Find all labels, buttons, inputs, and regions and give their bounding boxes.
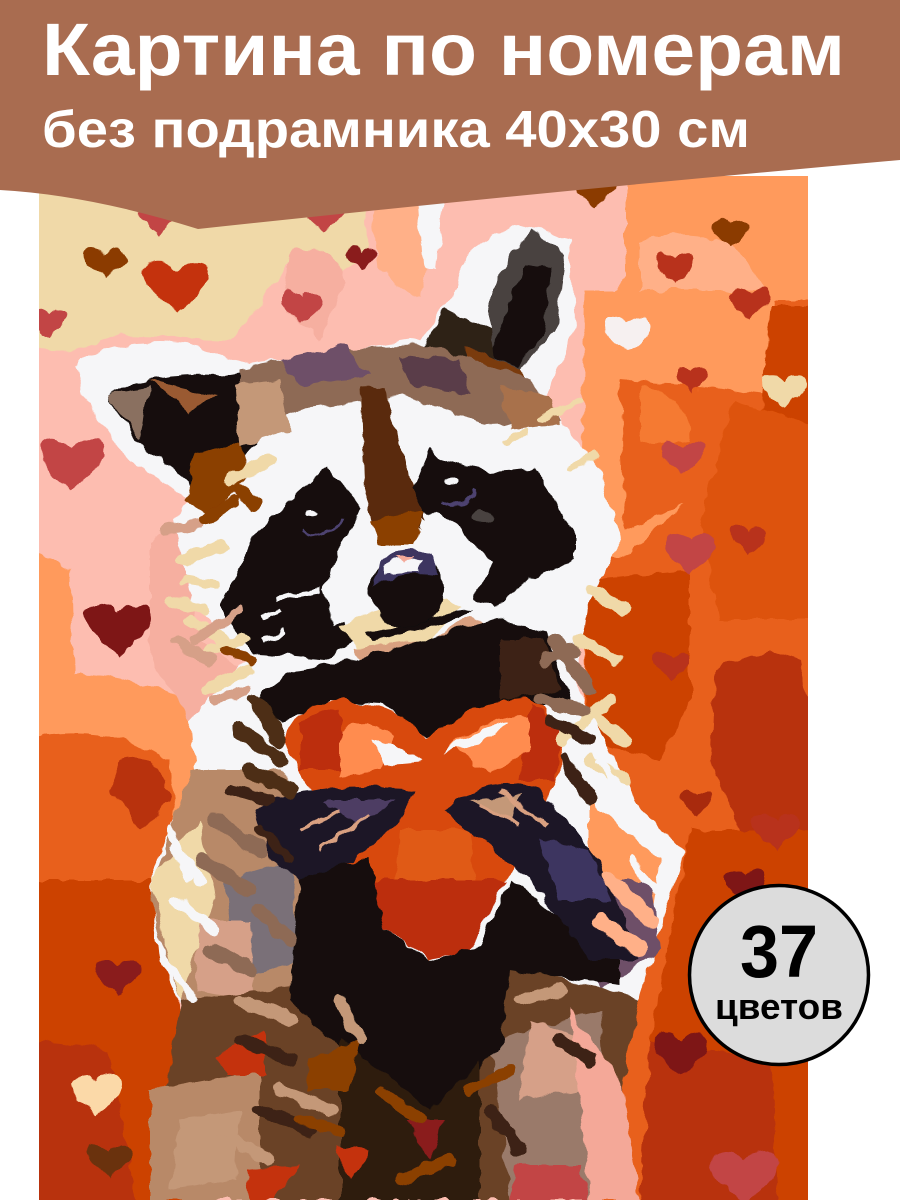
raccoon eyes — [303, 477, 495, 536]
title banner — [0, 0, 900, 229]
colour count badge — [690, 886, 868, 1064]
heart decorations in the background — [29, 176, 807, 1200]
nose — [370, 549, 444, 627]
eye masks — [223, 447, 577, 660]
raccoon white fur silhouette — [75, 200, 685, 1200]
painting: raccoon with heart — [20, 160, 830, 1200]
raccoon body fur — [150, 770, 660, 1200]
subtitle: без подрамника 40х30 см — [42, 101, 750, 159]
fur dabs — [165, 400, 665, 1180]
chin and neck black fur — [253, 617, 570, 737]
colour count badge: 37 — [740, 910, 818, 993]
raccoon paws — [255, 783, 640, 960]
painting background colour fields — [20, 160, 830, 1200]
left ear — [108, 370, 265, 515]
title: Картина по номерам — [42, 8, 845, 91]
muzzle — [262, 517, 490, 665]
held heart — [285, 698, 561, 960]
top of head fur — [235, 345, 560, 545]
right ear — [424, 228, 564, 378]
colour count badge: цветов — [715, 986, 843, 1027]
